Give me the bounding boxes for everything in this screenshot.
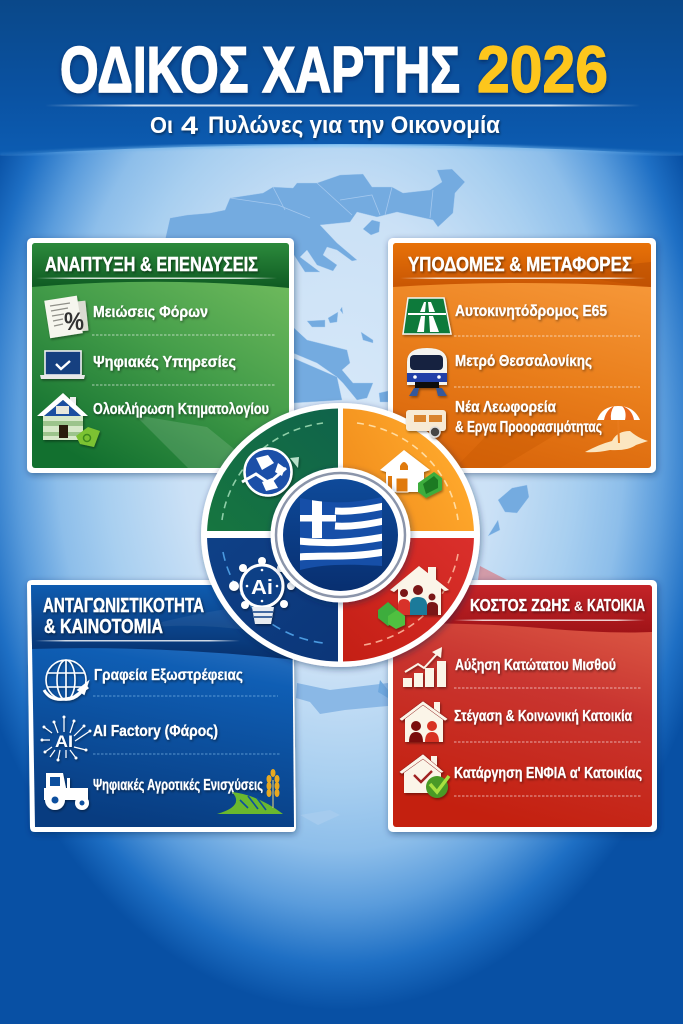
text: digital farm subsidies: Ψηφιακές Αγροτικές Ενισχύσεις xyxy=(93,777,263,794)
subtitle: Οι xyxy=(150,112,173,138)
icon: bus xyxy=(406,410,446,437)
central wheel xyxy=(201,403,480,667)
icon: house with people xyxy=(399,701,448,742)
centre medallion with flag xyxy=(270,468,410,602)
icon: globe with plane xyxy=(44,660,88,700)
title: ΟΔΙΚΟΣ ΧΑΡΤΗΣ xyxy=(60,33,460,106)
subtitle: 4 xyxy=(181,112,198,140)
icon: metro train xyxy=(407,348,447,396)
text: minimum wage rise: Αύξηση Κατώτατου Μισθού xyxy=(455,657,616,674)
icon: house with check xyxy=(399,754,449,798)
icon: house with money xyxy=(380,450,442,498)
heading: ΥΠΟΔΟΜΕΣ & ΜΕΤΑΦΟΡΕΣ xyxy=(408,254,632,276)
icon: AI gear bulb: Ai xyxy=(251,577,273,599)
segment: blue xyxy=(207,538,338,662)
panel: cost of living and housing xyxy=(388,580,657,832)
icon: Greek flag xyxy=(300,497,382,570)
text: digital services: Ψηφιακές Υπηρεσίες xyxy=(93,354,236,371)
icon: family house with money xyxy=(378,566,449,629)
segment: orange xyxy=(343,408,474,531)
segment: red xyxy=(343,538,474,662)
heading: & xyxy=(574,598,583,614)
panel: competitiveness and innovation xyxy=(27,580,296,832)
text: AI Factory: AI Factory (Φάρος) xyxy=(93,723,218,740)
icon: AI circuit: AI xyxy=(55,732,73,751)
icon: tax document xyxy=(44,296,88,338)
icon: laptop xyxy=(40,351,85,379)
subtitle: Πυλώνες για την Οικονομία xyxy=(208,112,500,139)
header band xyxy=(0,0,683,155)
text: motorway E65: Αυτοκινητόδρομος Ε65 xyxy=(455,303,607,320)
panel: growth and investment xyxy=(27,238,294,473)
heading: ΑΝΑΠΤΥΞΗ & ΕΠΕΝΔΥΣΕΙΣ xyxy=(45,254,258,276)
icon: tax document: % xyxy=(64,308,84,336)
heading: ΑΝΤΑΓΩΝΙΣΤΙΚΟΤΗΤΑ xyxy=(43,595,204,617)
heading: ΚΑΤΟΙΚΙΑ xyxy=(587,595,645,615)
title: 2026 xyxy=(477,32,608,106)
heading: ΚΟΣΤΟΣ ΖΩΗΣ xyxy=(470,595,570,615)
map of Greece xyxy=(165,169,529,825)
icon: wheat and field xyxy=(217,769,283,814)
text: outreach offices: Γραφεία Εξωστρέφειας xyxy=(94,667,243,684)
text: Thessaloniki metro: Μετρό Θεσσαλονίκης xyxy=(455,353,592,370)
text: new buses and accessibility works: Νέα Λεωφορεία xyxy=(455,399,556,416)
text: new buses and accessibility works xyxy=(455,399,602,436)
icon: globe with trend line xyxy=(242,448,299,496)
text: cadastre completion: Ολοκλήρωση Κτηματολογίου xyxy=(93,401,269,418)
heading xyxy=(43,595,204,638)
icon: AI circuit xyxy=(40,716,92,762)
icon: rising bar chart xyxy=(403,647,446,687)
heading: & ΚΑΙΝΟΤΟΜΙΑ xyxy=(44,616,163,638)
text: tax cuts: Μειώσεις Φόρων xyxy=(93,304,208,321)
icon: motorway sign xyxy=(403,298,451,334)
segment: green xyxy=(207,408,338,531)
icon: house with money xyxy=(37,393,100,447)
icon: AI gear bulb xyxy=(229,557,295,624)
text: new buses and accessibility works: & Εργα Προορασιμότητας xyxy=(455,419,602,436)
icon: beach umbrella xyxy=(585,406,648,452)
panel: infrastructure and transport xyxy=(388,238,656,473)
text: housing and social housing: Στέγαση & Κοινωνική Κατοικία xyxy=(454,708,632,725)
icon: tractor xyxy=(44,773,89,810)
